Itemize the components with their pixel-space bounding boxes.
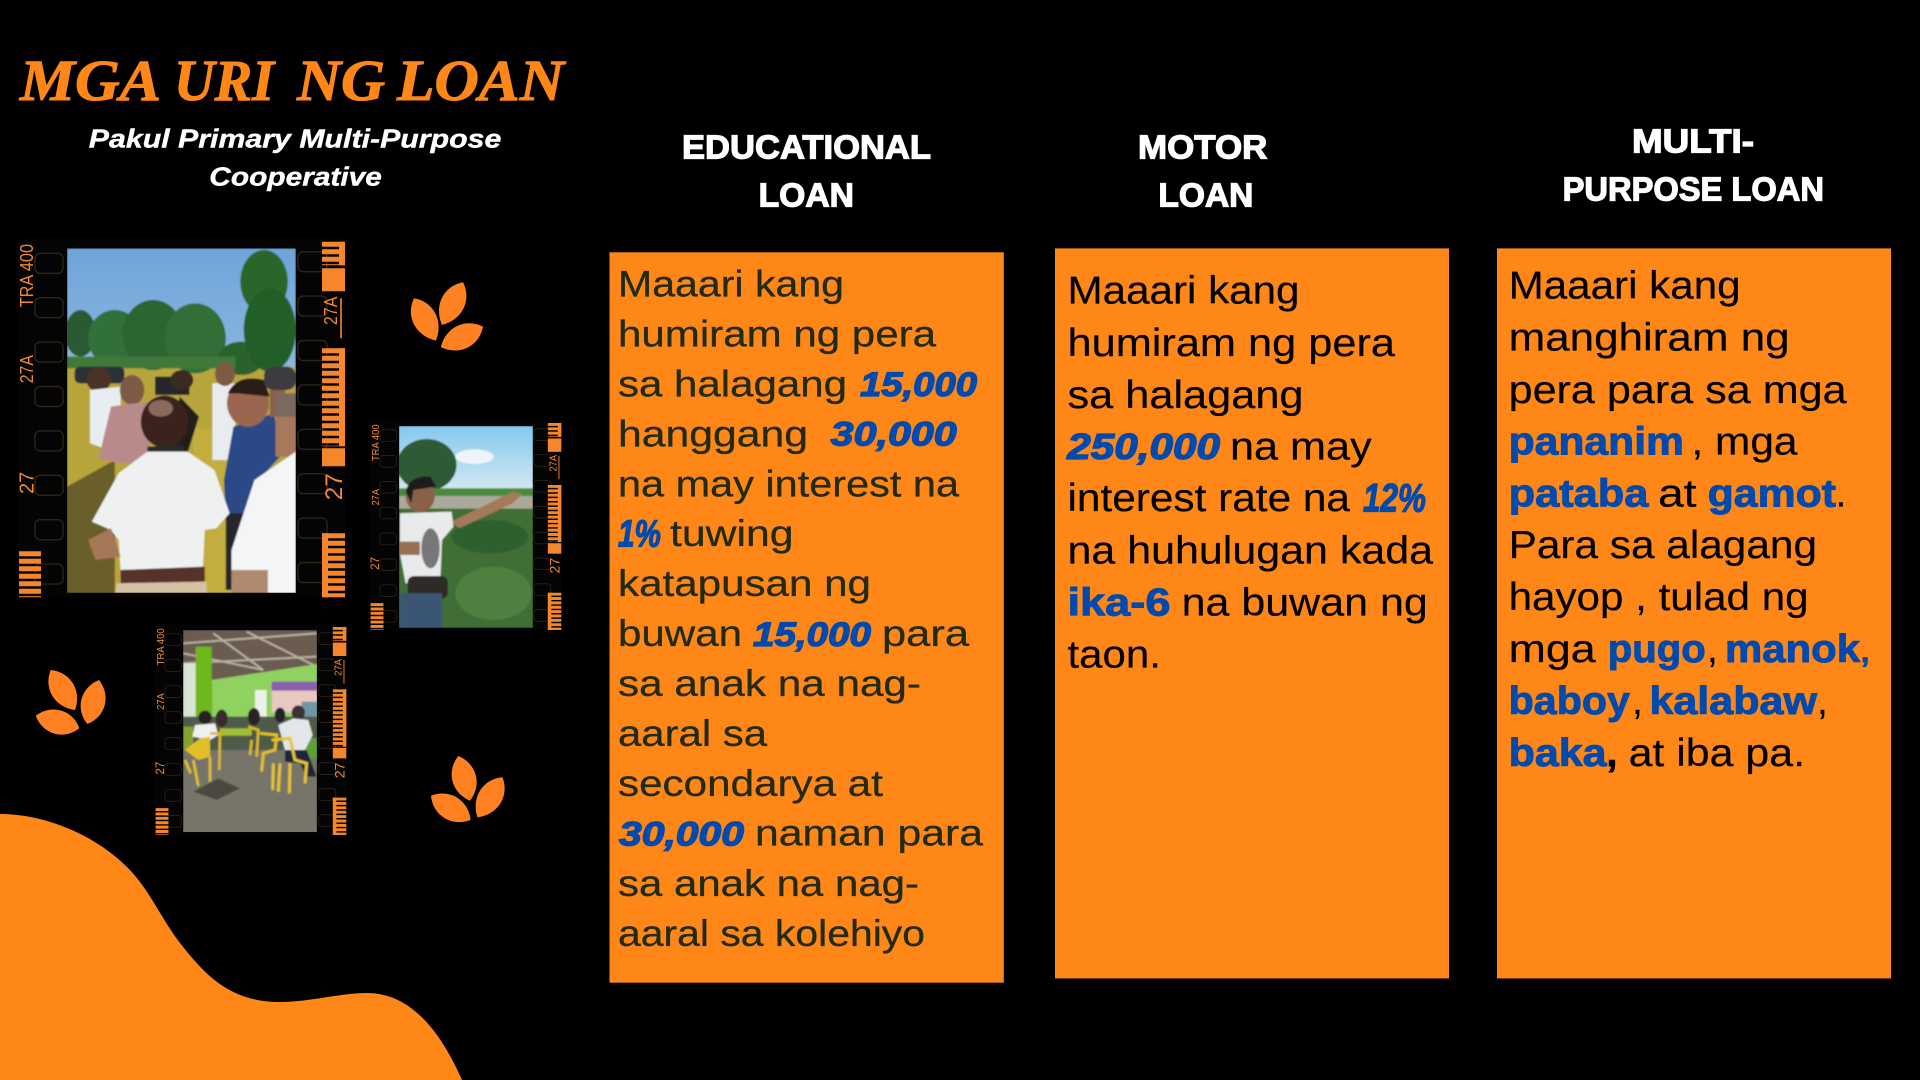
motor loan body text: taon.: [1068, 633, 1161, 676]
subtitle: Pakul Primary Multi-Purpose: [89, 125, 501, 153]
figures: [75, 367, 124, 383]
film frame: 27A: [155, 693, 167, 710]
multi-purpose loan body text: Maaari kang: [1509, 264, 1741, 308]
educational loan body text: tuwing: [670, 513, 794, 554]
multi-purpose loan body text: Para sa alagang: [1509, 524, 1817, 567]
panel: motor loan: [1055, 248, 1449, 978]
educational loan body text: 1%: [618, 514, 661, 556]
title: [19, 48, 566, 113]
motor loan body text: humiram ng pera: [1068, 322, 1395, 365]
multi-purpose loan body text: pataba: [1509, 472, 1649, 515]
multi-purpose loan body text: gamot: [1708, 472, 1836, 515]
film frame: TRA 400: [17, 244, 37, 307]
panel: educational loan: [610, 252, 1004, 983]
film frame: 27: [332, 762, 348, 778]
motor loan body text: interest rate na: [1068, 477, 1350, 520]
educational loan body text: na may interest na: [618, 463, 959, 504]
film frame: [154, 625, 348, 835]
educational loan body text: aaral sa kolehiyo: [618, 913, 925, 954]
heading: multi-purpose loan: [1563, 124, 1824, 209]
icon: leaf sprig, lower right: [425, 753, 513, 830]
film strip photo: rice field visit: [16, 238, 348, 597]
educational loan body text: naman para: [755, 813, 983, 854]
film frame: 27A: [370, 489, 382, 505]
motor loan body text: na buwan ng: [1182, 581, 1428, 624]
film frame: 27A: [17, 355, 37, 383]
heading: educational loan: EDUCATIONAL: [682, 129, 931, 166]
educational loan body text: buwan: [618, 613, 742, 654]
film frame: 27A: [333, 659, 345, 676]
panel: multi-purpose loan: [1497, 248, 1891, 978]
multi-purpose loan body text: [1509, 264, 1869, 775]
multi-purpose loan body text: baka: [1509, 732, 1607, 775]
motor loan body text: 12%: [1363, 477, 1426, 521]
title: NG: [296, 48, 385, 113]
heading: motor loan: MOTOR: [1138, 129, 1267, 166]
photo: meeting under a roof: [183, 630, 317, 833]
film frame: [369, 421, 563, 630]
multi-purpose loan body text: ,: [1817, 680, 1828, 723]
multi-purpose loan body text: pugo: [1608, 628, 1706, 671]
multi-purpose loan body text: mga: [1509, 628, 1596, 671]
motor loan body text: 250,000: [1066, 426, 1220, 467]
educational loan body text: hanggang: [618, 413, 808, 454]
heading: educational loan: [682, 129, 931, 215]
educational loan body text: 30,000: [831, 416, 957, 454]
multi-purpose loan body text: at iba pa.: [1629, 732, 1805, 775]
film strip photo: cooperative meeting: [154, 625, 348, 835]
title: URI: [174, 48, 276, 113]
film frame: 27: [154, 762, 167, 775]
heading: motor loan: [1138, 129, 1267, 215]
motor loan body text: Maaari kang: [1068, 270, 1300, 312]
multi-purpose loan body text: ,: [1632, 680, 1643, 723]
educational loan body text: sa anak na nag-: [618, 663, 921, 704]
film frame: 27: [369, 557, 382, 570]
educational loan body text: 15,000: [753, 616, 871, 654]
heading: multi-purpose loan: MULTI-: [1632, 124, 1754, 160]
multi-purpose loan body text: ,: [1707, 628, 1718, 671]
title: MGA: [19, 48, 161, 113]
film frame: [16, 238, 348, 597]
motor loan body text: na huhulugan kada: [1068, 529, 1433, 572]
multi-purpose loan body text: manok: [1725, 628, 1860, 671]
multi-purpose loan body text: manghiram ng: [1509, 316, 1790, 360]
film frame: 27A: [321, 297, 341, 325]
multi-purpose loan body text: pera para sa mga: [1509, 369, 1847, 412]
film frame: TRA 400: [155, 628, 167, 665]
film frame: 27: [547, 558, 563, 573]
icon: leaf sprig, left: [32, 664, 111, 740]
film frame: TRA 400: [370, 424, 382, 461]
title: LOAN: [396, 48, 566, 113]
educational loan body text: Maaari kang: [618, 264, 844, 305]
motor loan body text: [1066, 270, 1433, 676]
subtitle: [89, 125, 501, 192]
educational loan body text: 15,000: [860, 366, 977, 404]
film frame: 27A: [548, 455, 560, 471]
heading: educational loan: LOAN: [759, 178, 854, 215]
subtitle: Cooperative: [209, 164, 382, 192]
educational loan body text: 30,000: [619, 816, 744, 854]
photo: man pointing: [397, 426, 533, 629]
educational loan body text: sa anak na nag-: [618, 863, 919, 904]
educational loan body text: katapusan ng: [618, 563, 871, 604]
heading: motor loan: LOAN: [1158, 178, 1253, 215]
multi-purpose loan body text: hayop , tulad ng: [1509, 576, 1809, 619]
motor loan body text: ika-6: [1068, 581, 1170, 624]
multi-purpose loan body text: ,: [1861, 636, 1869, 669]
multi-purpose loan body text: ,: [1606, 732, 1617, 775]
heading: multi-purpose loan: PURPOSE LOAN: [1563, 172, 1824, 209]
decorative orange blob, bottom left: [0, 814, 462, 1080]
multi-purpose loan body text: , mga: [1692, 421, 1798, 464]
motor loan body text: na may: [1230, 426, 1372, 468]
educational loan body text: aaral sa: [618, 713, 767, 754]
educational loan body text: sa halagang: [618, 364, 847, 404]
photo: officials in rice field: [65, 248, 296, 597]
film frame: 27: [16, 472, 38, 494]
multi-purpose loan body text: pananim: [1509, 421, 1684, 464]
educational loan body text: [618, 264, 983, 954]
educational loan body text: humiram ng pera: [618, 314, 936, 355]
film strip photo: man pointing at crops: [369, 421, 563, 630]
multi-purpose loan body text: at: [1658, 472, 1697, 515]
film frame: 27: [321, 473, 348, 500]
educational loan body text: secondarya at: [618, 763, 884, 804]
motor loan body text: sa halagang: [1068, 374, 1304, 417]
educational loan body text: para: [882, 613, 969, 654]
multi-purpose loan body text: .: [1836, 472, 1846, 515]
multi-purpose loan body text: baboy: [1509, 680, 1630, 723]
icon: leaf sprig, upper right of photos: [403, 277, 488, 358]
multi-purpose loan body text: kalabaw: [1649, 680, 1818, 723]
